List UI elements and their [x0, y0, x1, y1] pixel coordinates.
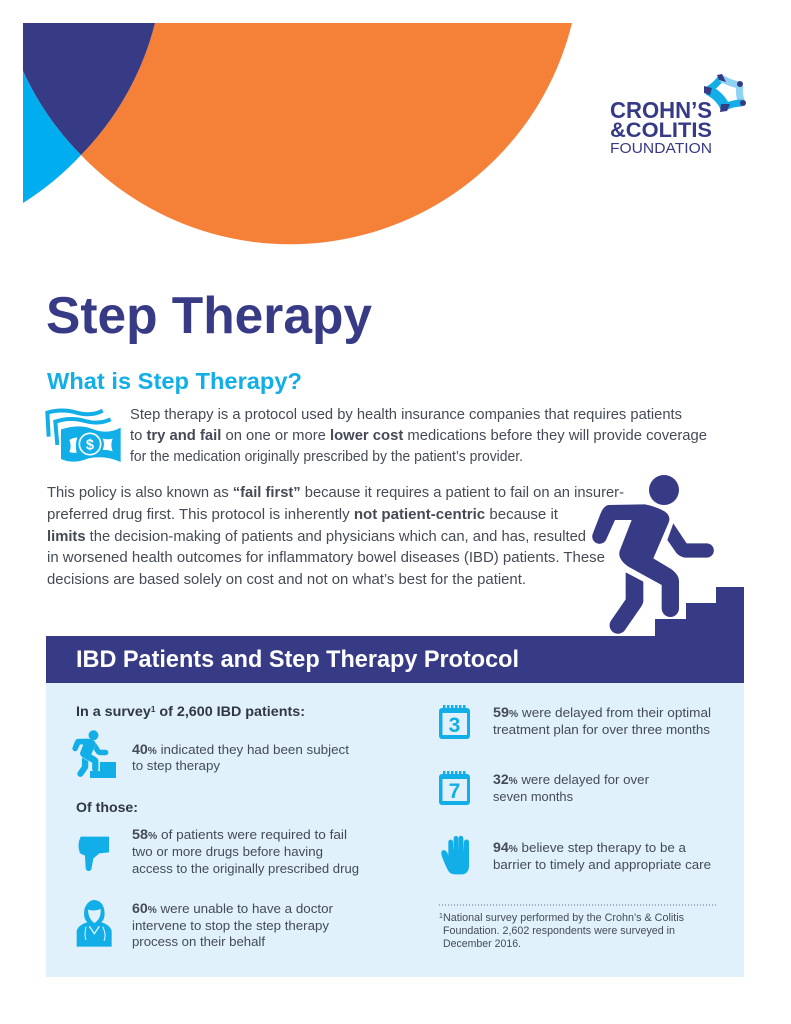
subheading: of those: Of those:: [76, 799, 138, 815]
fail first text block: in worsened health outcomes for inflammatory bowel diseases (IBD) patients. These: [47, 550, 605, 566]
logo: Crohn's & Colitis Foundation: CROHN’S: [610, 97, 712, 123]
logo: Crohn's & Colitis Foundation: &COLITIS: [610, 119, 712, 142]
stat: 94 percent: 94% believe step therapy to be a: [493, 839, 687, 855]
icon: thumbs down: [78, 837, 109, 871]
fail first text block: This policy is also known as “fail first” because it requires a patient to fail on an insurer-: [47, 485, 624, 501]
icon: money bills: $: [86, 437, 94, 453]
stat: 94 percent: [493, 839, 711, 872]
footnote: National survey performed by the Crohn’s & Colitis: [443, 912, 684, 924]
stat: 94 percent: barrier to timely and appropriate care: [493, 857, 711, 872]
banner with stairs: [46, 587, 744, 683]
icon: calendar 7: 7: [449, 780, 460, 803]
banner with stairs: IBD Patients and Step Therapy Protocol: [76, 646, 519, 673]
survey heading: of 2,600 IBD patients:: [155, 703, 305, 719]
footnote: 1: [439, 913, 443, 920]
stat: 60 percent: process on their behalf: [132, 934, 265, 949]
stat: 58 percent: two or more drugs before having: [132, 844, 323, 859]
stat: 60 percent: intervene to stop the step therapy: [132, 918, 329, 933]
stat: 40 percent: to step therapy: [132, 758, 220, 773]
icon: calendar 7: [439, 773, 470, 805]
intro text block: Step therapy is a protocol used by health insurance companies that requires patients: [130, 407, 682, 423]
stat: 40 percent: [132, 741, 349, 773]
footnote: [439, 912, 684, 950]
stat: 32 percent: [493, 771, 650, 804]
icon: calendar 3: 3: [449, 714, 460, 737]
logo: Crohn's & Colitis Foundation: [610, 74, 746, 157]
icon: raised hand: [441, 836, 469, 874]
fail first text block: [47, 485, 624, 588]
footnote: December 2016.: [443, 938, 521, 950]
stat: 59 percent: 59% were delayed from their optimal: [493, 704, 711, 720]
icon: small person on stairs: [73, 731, 116, 778]
icon: money bills: [47, 410, 121, 462]
stat: 32 percent: 32% were delayed for over: [493, 771, 650, 787]
intro text block: to try and fail on one or more lower cost medications before they will provide coverage: [130, 428, 707, 444]
panel: survey background: [46, 683, 744, 977]
title: Step Therapy: [46, 287, 372, 345]
footnote: Foundation. 2,602 respondents were surveyed in: [443, 925, 675, 937]
stat: 58 percent: access to the originally prescribed drug: [132, 861, 359, 876]
fail first text block: preferred drug first. This protocol is inherently not patient-centric because it: [47, 507, 558, 523]
stat: 59 percent: [493, 704, 711, 737]
fail first text block: decisions are based solely on cost and not on what’s best for the patient.: [47, 572, 526, 588]
stat: 58 percent: [132, 826, 359, 876]
intro text block: for the medication originally prescribed by the patient’s provider.: [130, 449, 523, 465]
icon: person climbing stairs: [592, 475, 714, 634]
survey heading: In a survey: [76, 703, 149, 719]
stat: 59 percent: treatment plan for over three months: [493, 722, 710, 737]
stat: 40 percent: 40% indicated they had been subject: [132, 741, 349, 757]
stat: 60 percent: 60% were unable to have a doctor: [132, 900, 334, 916]
header graphic: overlapping circles: [23, 23, 572, 244]
stat: 60 percent: [132, 900, 334, 949]
survey heading: 1: [151, 705, 156, 714]
stat: 32 percent: seven months: [493, 789, 573, 804]
icon: doctor: [77, 900, 112, 947]
stat: 58 percent: 58% of patients were required to fail: [132, 826, 347, 842]
logo: Crohn's & Colitis Foundation: FOUNDATION: [610, 140, 712, 157]
intro text block: [130, 407, 707, 465]
heading: what is step therapy: What is Step Therapy?: [47, 368, 302, 394]
icon: calendar 3: [439, 707, 470, 739]
fail first text block: limits the decision-making of patients and physicians which can, and has, resulted: [47, 529, 586, 545]
